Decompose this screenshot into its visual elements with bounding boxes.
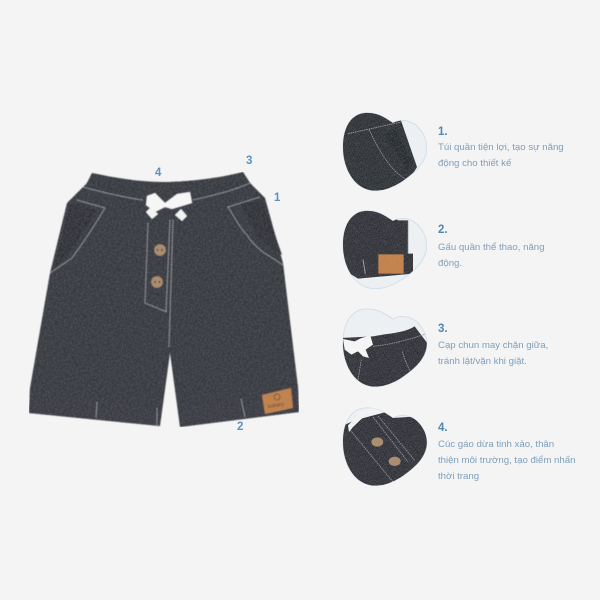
detail 2: hem with label [342, 210, 427, 289]
shorts body [29, 172, 299, 427]
detail 4 text: Cúc gáo dừa tinh xảo, thân [438, 439, 554, 450]
detail 3 text: 3. [438, 323, 448, 335]
detail 4 text: thiện môi trường, tạo điểm nhấn [438, 455, 575, 466]
heart outline [343, 113, 427, 191]
detail 3: waistband [342, 308, 428, 388]
detail 4 text: 4. [438, 422, 448, 434]
callout number 1: 1 [274, 192, 281, 204]
callout number 2: 2 [237, 421, 243, 433]
waistband [75, 172, 260, 218]
detail 3 text: Cạp chun may chặn giữa, [438, 340, 548, 351]
detail 4 text [438, 422, 575, 482]
waistband crop [343, 326, 427, 387]
waistband gathers [98, 178, 238, 195]
drawstring bow [146, 192, 192, 221]
placket crop [343, 412, 427, 486]
detail 4 text: thời trang [438, 471, 479, 482]
detail 2 text: động. [438, 258, 462, 269]
detail 1 text: Túi quần tiện lợi, tạo sự năng [438, 142, 564, 153]
detail 4: buttons [342, 408, 428, 486]
detail 1: pocket [342, 112, 427, 192]
detail 1 text: 1. [438, 126, 448, 138]
callout number 3: 3 [246, 155, 252, 167]
leather label: bobaby [267, 401, 285, 410]
hem crop [343, 210, 413, 279]
detail 1 text [438, 126, 564, 169]
leather label [262, 388, 293, 414]
callout number 4: 4 [155, 167, 162, 179]
detail 2 text: 2. [438, 224, 448, 236]
buttons [151, 244, 166, 288]
detail 1 text: động cho thiết kế [438, 158, 512, 169]
heart outline [343, 211, 427, 289]
detail 2 text [438, 224, 545, 269]
pocket crop [343, 112, 417, 191]
heart outline [343, 408, 427, 486]
stitching [50, 183, 283, 425]
detail 3 text [438, 323, 548, 367]
main product: denim shorts [29, 172, 299, 427]
cuffs [29, 387, 299, 427]
pockets [53, 200, 282, 270]
detail 3 text: tránh lật/vặn khi giặt. [438, 356, 527, 367]
heart outline [343, 309, 427, 387]
detail 2 text: Gấu quần thể thao, năng [438, 242, 545, 253]
